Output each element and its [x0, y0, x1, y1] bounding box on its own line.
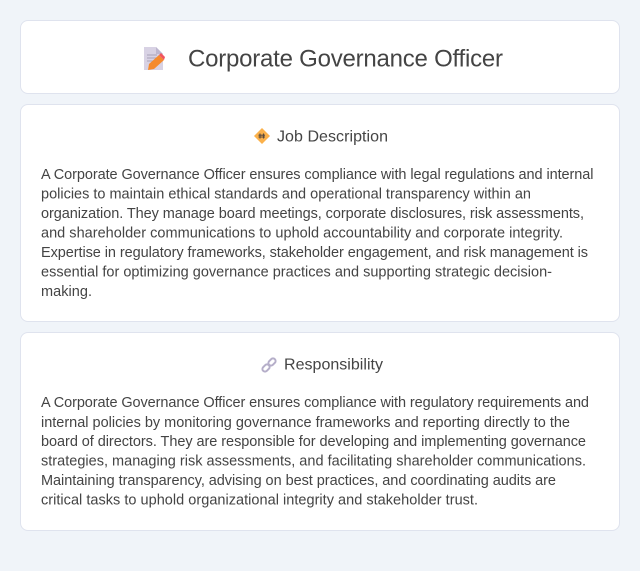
text: job description: making.: [41, 284, 92, 300]
text: job description: policies to maintain ethical standards and operational transparency within an: [41, 186, 531, 202]
panel: job description: [20, 104, 620, 322]
panel: title card: [20, 20, 620, 94]
text: job description: Expertise in regulatory frameworks, stakeholder engagement, and risk management is: [41, 245, 588, 261]
text: job description: organization. They manage board meetings, corporate disclosures, risk assessments,: [41, 206, 584, 222]
text: responsibility: internal policies by monitoring governance frameworks and reporting directly to the: [41, 415, 570, 431]
text: responsibility: Maintaining transparency, advising on best practices, and coordinating audits are: [41, 473, 556, 489]
icon: orange diamond: [254, 128, 270, 144]
text: responsibility: A Corporate Governance Officer ensures compliance with regulatory requirements and: [41, 395, 589, 411]
icon: document with pencil: [144, 47, 165, 70]
text: responsibility: critical tasks to uphold organizational integrity and stakeholder trust.: [41, 492, 478, 508]
panel: responsibility: [20, 332, 620, 531]
text: job description: [41, 167, 594, 300]
text: responsibility: strategies, managing risk assessments, and facilitating shareholder communications.: [41, 454, 586, 470]
text: job description: A Corporate Governance Officer ensures compliance with legal regulations and internal: [41, 167, 594, 183]
text: job description: and shareholder communications to uphold accountability and corporate integrity.: [41, 226, 563, 242]
icon: chain link: [262, 357, 276, 373]
title: Corporate Governance Officer: [188, 46, 503, 72]
text: job description: essential for optimizing governance practices and supporting strategic decision-: [41, 264, 552, 280]
text: responsibility: board of directors. They are responsible for developing and implementing governance: [41, 434, 586, 450]
heading: job description: Job Description: [277, 128, 388, 146]
heading: responsibility: Responsibility: [284, 356, 383, 374]
